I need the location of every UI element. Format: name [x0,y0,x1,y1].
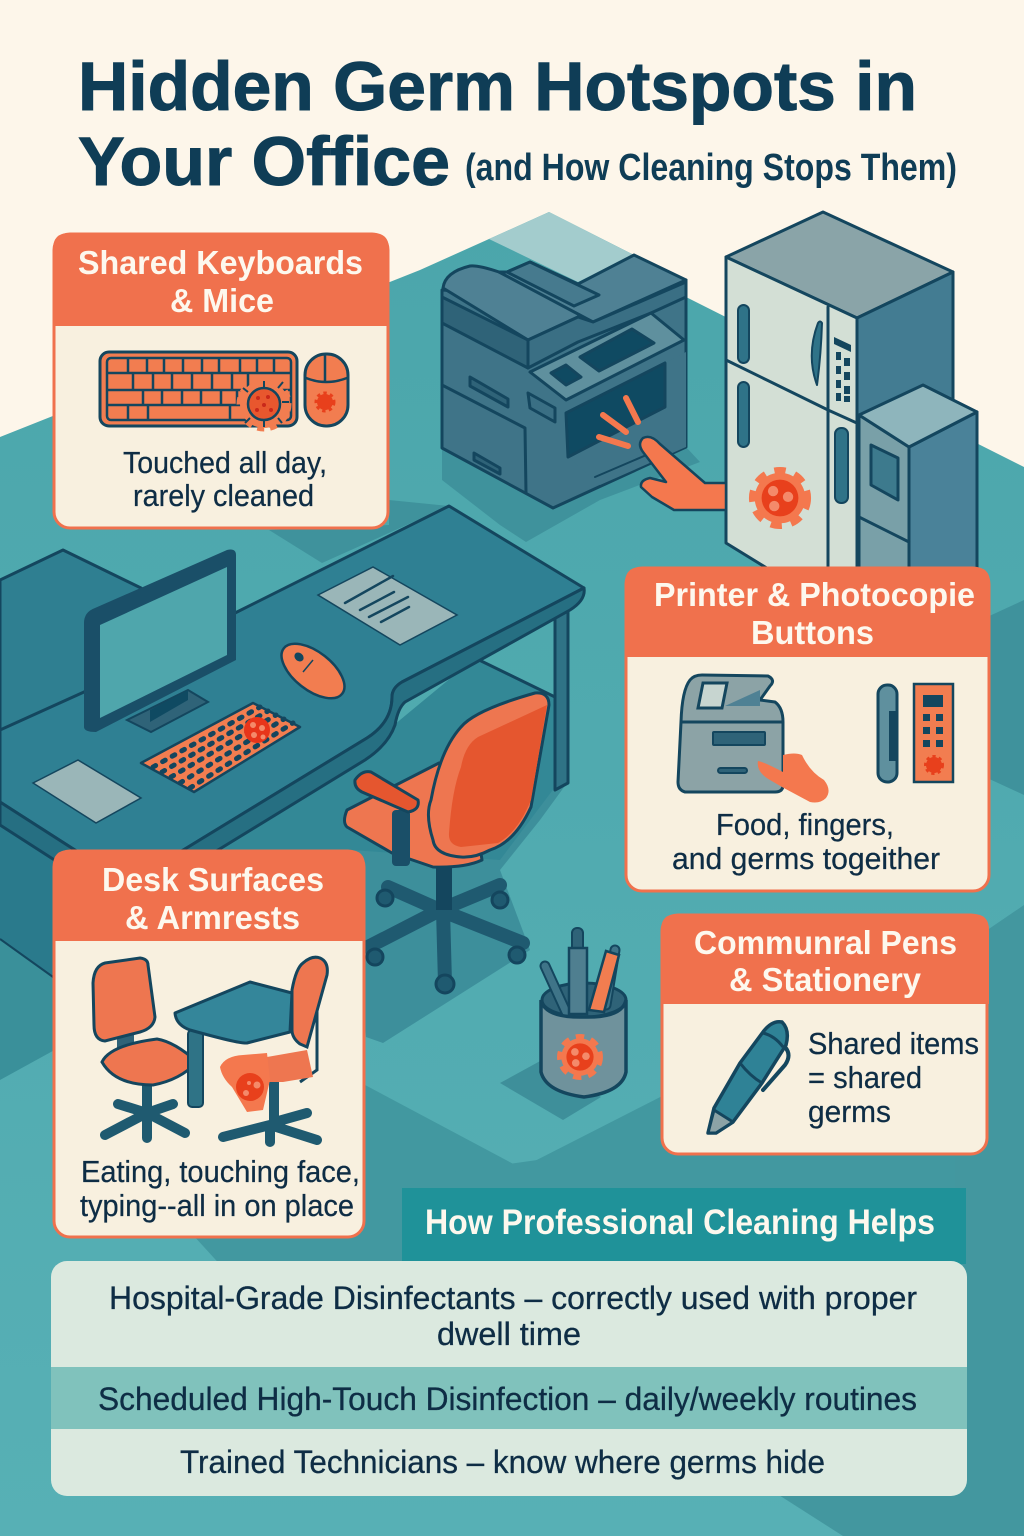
icon: door handle and keypad [878,684,953,782]
panel: communal pens and stationery [661,914,989,1154]
body text: Food, fingers, [716,807,894,842]
heading: Communral Pens [694,924,957,961]
title [78,48,957,200]
paper [318,567,457,645]
body text: rarely cleaned [133,478,314,513]
body text [808,1026,979,1129]
title: Your Office [78,123,450,200]
icon: germ on fridge [755,473,805,523]
photocopier illustration [442,255,686,508]
pencil cup with germ [541,928,626,1097]
desk with monitor, keyboard and mouse [0,506,584,870]
panel: shared keyboards and mice [53,233,389,528]
body text [80,1154,360,1223]
title: Hidden Germ Hotspots in [78,48,917,125]
benefit: hospital-grade disinfectants: Hospital-Grade Disinfectants – correctly used with proper [109,1280,917,1316]
cubicle divider [0,550,141,745]
benefit: hospital-grade disinfectants: dwell time [437,1316,581,1352]
body text [123,445,327,513]
hand pressing printer button [599,398,726,510]
body text: typing--all in on place [80,1188,354,1223]
panel: cleaning benefits list [51,1261,967,1496]
desk surface [0,506,584,852]
tablet [33,760,141,823]
heading [102,861,324,936]
icon: table [175,982,292,1107]
heading: Desk Surfaces [102,861,324,898]
desk front edge [180,588,584,858]
monitor [84,550,236,732]
heading [78,244,363,319]
icon: printer with hand [678,675,829,802]
benefit: trained technicians: Trained Technicians – know where germs hide [180,1444,825,1480]
icon: left chair [93,958,197,1138]
heading: Buttons [751,614,874,651]
body text: = shared [808,1060,922,1095]
mouse [272,633,354,709]
under-desk legs and rail [408,544,568,790]
icon: mouse with germ [305,354,348,426]
icon: pen [708,1022,788,1133]
heading: & Armrests [125,899,300,936]
body text: Touched all day, [123,445,327,480]
heading: & Mice [170,282,274,319]
panel: printer and photocopier buttons [625,567,990,891]
benefit: scheduled disinfection: Scheduled High-Touch Disinfection – daily/weekly routines [98,1381,917,1417]
refrigerator illustration [726,212,977,600]
body text [672,807,940,876]
heading [654,576,975,651]
body text: germs [808,1094,891,1129]
panel: desk surfaces and armrests [53,850,365,1237]
body text: Eating, touching face, [81,1154,360,1189]
keyboard [141,703,300,792]
heading: Shared Keyboards [78,244,363,281]
heading: how professional cleaning helps: How Professional Cleaning Helps [425,1203,935,1242]
icon: right chair with germ [220,957,327,1142]
heading: & Stationery [729,961,922,998]
benefit: hospital-grade disinfectants [109,1280,917,1352]
body text: and germs togeither [672,841,940,876]
office chair [344,693,549,993]
icon: keyboard with germ [100,352,297,429]
body text: Shared items [808,1026,979,1061]
heading [694,924,957,998]
heading: Printer & Photocopie [654,576,975,613]
heading: how professional cleaning helps [402,1188,966,1264]
